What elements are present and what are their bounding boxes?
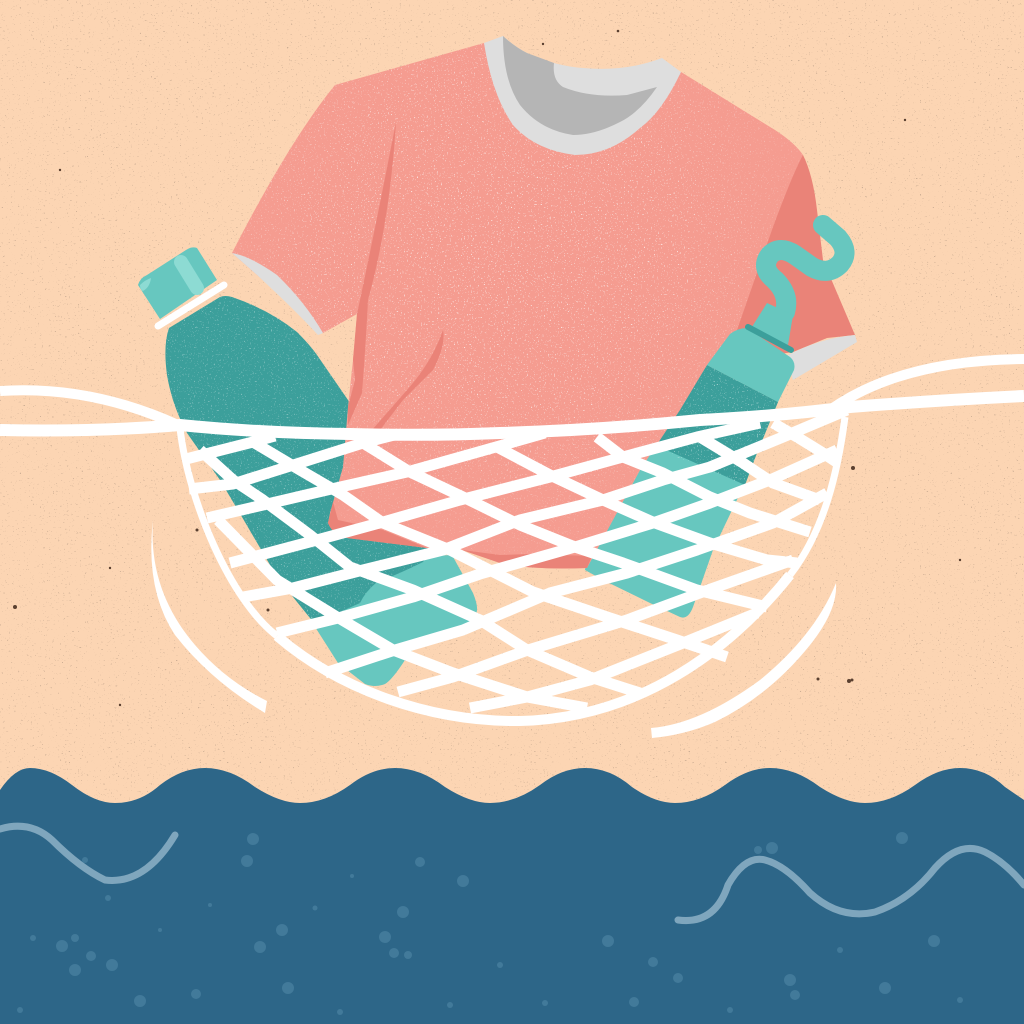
bottle lower body <box>310 555 477 686</box>
shirt fold: sleeve <box>348 122 396 425</box>
left sleeve cuff <box>232 253 323 335</box>
tube head shoulder <box>707 328 794 402</box>
water bubbles <box>17 832 963 1015</box>
toothpaste tube head <box>707 225 845 402</box>
t-shirt right sleeve <box>715 150 857 380</box>
bottle upper body <box>165 296 430 620</box>
t-shirt body <box>230 36 805 570</box>
net rim upper sides <box>180 417 845 636</box>
shirt speckle <box>230 40 805 570</box>
toothpaste tube body <box>585 365 780 618</box>
net top line <box>0 396 1024 435</box>
net rising strands <box>186 410 847 708</box>
bottle cap glint <box>140 278 151 291</box>
loose net strand: right <box>651 583 836 738</box>
shirt hem shadow <box>328 502 592 568</box>
shirt fold: knot <box>372 330 444 430</box>
sand dark grains <box>13 30 961 706</box>
net rim lower <box>277 575 790 721</box>
plastic bottle <box>138 247 477 686</box>
right sleeve cuff <box>786 335 857 380</box>
bottle neck ring <box>158 285 224 326</box>
bottle speckle <box>166 297 424 618</box>
sand speckle texture <box>0 0 1024 800</box>
tube dark band <box>655 365 778 485</box>
tube speckle <box>668 367 776 481</box>
net top second line <box>0 359 1024 425</box>
water streak: right <box>678 848 1024 921</box>
loose net strand: left <box>151 520 267 713</box>
bottle cap <box>138 247 217 319</box>
sea water <box>0 768 1024 1024</box>
water streak: left <box>0 826 175 880</box>
tube nozzle <box>750 303 793 345</box>
net falling strands <box>200 423 838 708</box>
collar ring <box>484 36 681 155</box>
fishing net <box>0 359 1024 721</box>
collar inside <box>503 36 657 135</box>
paste squiggle <box>766 225 845 312</box>
tube collar <box>748 327 791 350</box>
bottle cap highlight <box>181 262 197 288</box>
